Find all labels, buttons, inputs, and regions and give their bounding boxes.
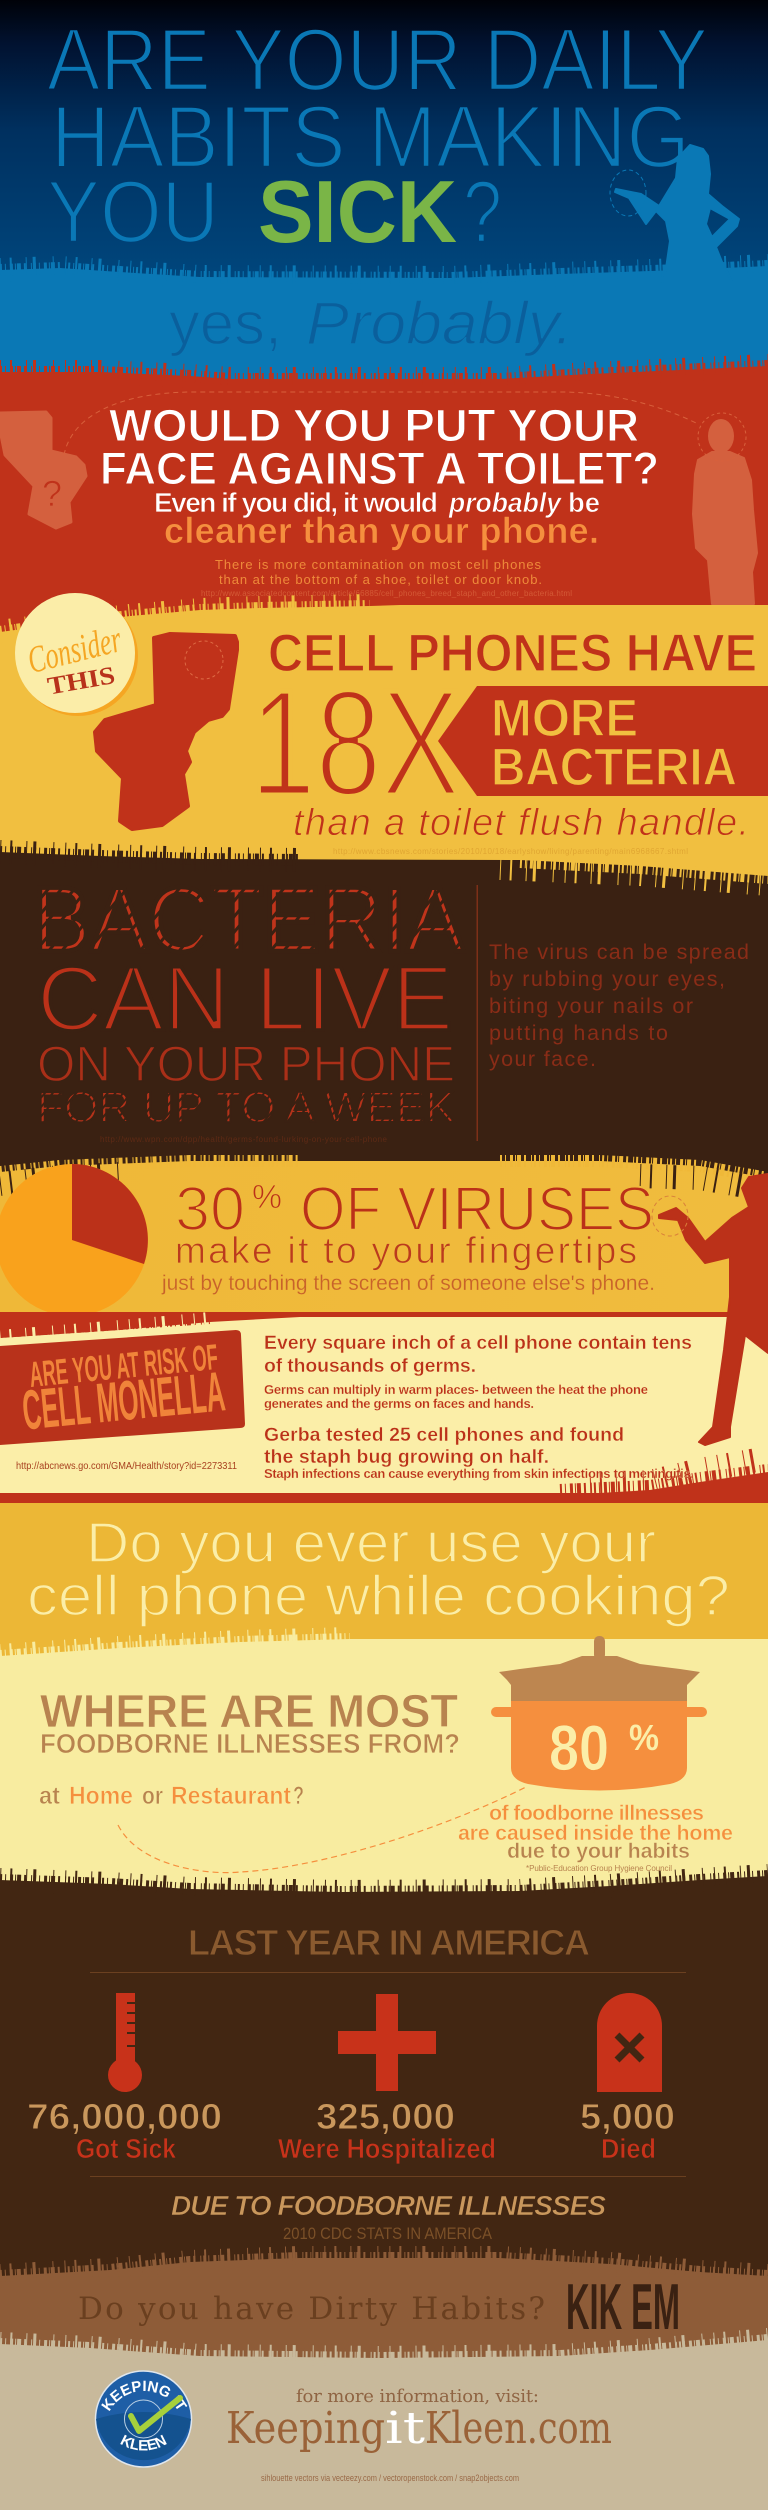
text: at home or restaurant: ?: [293, 1782, 304, 1810]
icon: cooking pot 80%: %: [629, 1717, 659, 1758]
text: than a toilet flush handle: than a toilet flush handle.: [293, 802, 749, 844]
heading: foodborne illnesses from: FOODBORNE ILLNESSES FROM?: [40, 1728, 460, 1759]
text: germs can multiply: [264, 1382, 648, 1411]
heading: due to foodborne illnesses: DUE TO FOODBORNE ILLNESSES: [171, 2190, 606, 2221]
text: every square inch: [264, 1332, 692, 1377]
panel: foodborne illnesses: [0, 1636, 768, 1900]
text: even if you did: be: [568, 487, 600, 518]
text: at home or restaurant: Restaurant: [171, 1782, 292, 1810]
text: virus spread: by rubbing your eyes,: [489, 967, 725, 991]
title: HABITS MAKING: [51, 87, 690, 186]
subheading: yes, Probably: [169, 290, 573, 357]
subheading: yes, Probably: Probably.: [306, 290, 573, 357]
text: keepingitkleen.com: it: [385, 2403, 425, 2454]
title: ?: [463, 162, 502, 261]
heading: can live: CAN LIVE: [37, 948, 453, 1050]
icon: man silhouette: [652, 1174, 768, 1445]
source note: *Public-Education Group Hygiene Council: [526, 1864, 672, 1873]
heading: where are most: WHERE ARE MOST: [40, 1685, 458, 1737]
source link: http://www.cbsnews.com/stories/2010/10/18/earlyshow/living/parenting/main6968667.shtml: [333, 847, 688, 856]
source link: http://abcnews.go.com/GMA/Health/story?id=2273311: [16, 1461, 237, 1472]
text: even if you did: [154, 487, 600, 518]
heading: would you put your face against a toilet: FACE AGAINST A TOILET?: [100, 443, 659, 494]
text: germs can multiply: Germs can multiply in warm places- between the heat the phone: [264, 1382, 648, 1397]
text: even if you did: Even if you did, it would: [154, 487, 438, 518]
stat: got sick: 76,000,000: [27, 2096, 222, 2137]
icon: tombstone: [597, 1993, 662, 2092]
arrow: dashed curve to pot: [118, 1787, 526, 1873]
text: for more information: for more information, visit:: [296, 2386, 539, 2407]
badge: consider this: [15, 593, 138, 716]
banner: more bacteria: [438, 686, 768, 797]
title: SICK: [258, 162, 457, 261]
panel: blue answer band: [0, 145, 768, 400]
divider: [90, 1972, 686, 1973]
text: at home or restaurant: Home: [69, 1782, 133, 1810]
text: gerba tested: Gerba tested 25 cell phones and found: [264, 1424, 624, 1446]
text: of foodborne illnesses caused at home: [458, 1801, 733, 1863]
stat: got sick: [27, 2096, 222, 2164]
title: YOU: [47, 162, 219, 261]
text: gerba tested: the staph bug growing on half.: [264, 1446, 549, 1468]
panel: last year in america: [0, 1876, 768, 2300]
text: every square inch: Every square inch of a cell phone contain tens: [264, 1332, 692, 1354]
title: ARE YOUR DAILY: [47, 10, 708, 109]
text: gerba tested: [264, 1424, 624, 1468]
vertical divider: [476, 885, 478, 1141]
heading: would you put your face against a toilet: WOULD YOU PUT YOUR: [109, 400, 639, 451]
text: at home or restaurant: at: [39, 1782, 61, 1810]
stat: got sick: Got Sick: [76, 2133, 176, 2164]
banner: more bacteria: MORE: [491, 689, 638, 748]
number: 18X: 18X: [250, 658, 460, 827]
text: virus spread: The virus can be spread: [489, 940, 749, 964]
heading: do you ever use your cell phone while cooking: [27, 1511, 730, 1628]
stat: died: 5,000: [580, 2096, 675, 2137]
text: keepingitkleen.com: Kleen.com: [425, 2403, 612, 2454]
tag: are you at risk of cell monella: [0, 1330, 245, 1445]
heading: on your phone: ON YOUR PHONE: [37, 1036, 455, 1092]
heading: 30% of viruses: %: [252, 1178, 282, 1215]
icon: toilet with question mark: ?: [42, 473, 62, 514]
icon: dashed circle on toilet: [185, 641, 223, 679]
panel: dirty habits: [0, 2258, 768, 2380]
tag: are you at risk of cell monella: CELL MONELLA: [19, 1359, 228, 1442]
badge: consider this: Consider: [23, 618, 126, 682]
icon: dashed connector arc: [64, 392, 696, 455]
text: even if you did: probably: [448, 487, 562, 518]
text: keepingitkleen.com: Keeping: [226, 2403, 385, 2454]
heading: would you put your face against a toilet: [100, 400, 659, 494]
banner: more bacteria: BACTERIA: [491, 738, 737, 797]
panel: 18X more bacteria: [0, 593, 768, 890]
panel: cell monella: [0, 1174, 768, 1504]
text: contamination note: [215, 557, 542, 587]
panel: 30 percent of viruses: [0, 1161, 768, 1330]
text: make it to your fingertips: make it to your fingertips: [175, 1230, 637, 1271]
stat: hospitalized: Were Hospitalized: [278, 2133, 496, 2164]
source link: http://www.wpn.com/dpp/health/germs-found-lurking-on-your-cell-phone: [100, 1135, 388, 1144]
stat: hospitalized: 325,000: [316, 2096, 455, 2137]
text: virus spread: putting hands to: [489, 1021, 668, 1045]
text: virus spread: biting your nails or: [489, 994, 693, 1018]
text: of foodborne illnesses caused at home: are caused inside the home: [458, 1821, 733, 1845]
text: contamination note: than at the bottom of a shoe, toilet or door knob.: [219, 572, 542, 587]
heading: for up to a week: FOR UP TO A WEEK: [37, 1083, 455, 1132]
stat: died: Died: [601, 2133, 656, 2164]
stat: died: [580, 2096, 675, 2164]
subheading: yes, Probably: yes,: [169, 290, 282, 357]
text: 2010 cdc stats: 2010 CDC STATS IN AMERICA: [283, 2224, 493, 2243]
logo: keeping it kleen: KLEEN: [120, 2434, 167, 2450]
tag: are you at risk of cell monella: ARE YOU AT RISK OF: [28, 1336, 220, 1395]
title: [47, 10, 708, 261]
stat: hospitalized: [278, 2096, 496, 2164]
text: virus spread: your face.: [489, 1047, 596, 1071]
text: keepingitkleen.com: [226, 2403, 612, 2454]
source link: http://www.associatedcontent.com/article/66885/cell_phones_breed_staph_and_other_bacteria.html: [201, 589, 572, 598]
panel: bacteria can live: [0, 852, 768, 1200]
logo: keeping it kleen: [94, 2370, 192, 2468]
text: of foodborne illnesses caused at home: due to your habits: [507, 1839, 690, 1863]
icon: toilet with question mark: [0, 412, 86, 528]
text: of foodborne illnesses caused at home: of foodborne illnesses: [489, 1801, 704, 1825]
text: every square inch: of thousands of germs.: [264, 1355, 476, 1377]
text: credits: sihlouette vectors via vecteezy.com / vectoropenstock.com / snap2objects.com: [261, 2473, 519, 2483]
icon: dashed circle around phone: [610, 170, 646, 216]
text: cleaner than your phone: cleaner than your phone.: [164, 510, 599, 551]
badge: consider this: THIS: [45, 662, 117, 701]
icon: medical cross: [338, 1994, 436, 2091]
text: at home or restaurant: or: [142, 1782, 163, 1810]
icon: person silhouette: [693, 413, 757, 604]
text: germs can multiply: generates and the germs on faces and hands.: [264, 1396, 534, 1411]
text: contamination note: There is more contamination on most cell phones: [215, 557, 542, 572]
icon: woman silhouette: [615, 145, 739, 282]
icon: cooking pot 80%: [491, 1636, 707, 1790]
icon: thermometer: [108, 1993, 142, 2092]
text: do you have dirty habits: Do you have Dirty Habits?: [78, 2291, 545, 2327]
chart: pie 30 percent: [0, 1164, 148, 1316]
heading: do you ever use your cell phone while cooking: Do you ever use your: [86, 1511, 656, 1575]
panel: night sky header: [0, 0, 768, 300]
icon: cooking pot 80%: 80: [549, 1712, 609, 1784]
heading: last year in america: LAST YEAR IN AMERICA: [188, 1922, 590, 1963]
panel: cooking question: [0, 1503, 768, 1663]
text: at home or restaurant: [39, 1782, 304, 1810]
icon: red toilet: [95, 634, 237, 829]
heading: 30% of viruses: OF VIRUSES: [300, 1175, 654, 1244]
divider: [90, 2176, 686, 2177]
text: virus spread: [489, 940, 749, 1071]
heading: 30% of viruses: 30: [175, 1175, 245, 1244]
text: just by touching: just by touching the screen of someone else's phone.: [161, 1272, 655, 1295]
heading: do you ever use your cell phone while cooking: cell phone while cooking?: [27, 1564, 730, 1628]
panel: toilet question: [0, 366, 768, 640]
logo: keeping it kleen: KEEPING IT: [101, 2380, 188, 2411]
heading: bacteria dashed: BACTERIA: [33, 869, 465, 971]
panel: footer: [0, 2328, 768, 2510]
text: staph infections: Staph infections can cause everything from skin infections to meningitis.: [264, 1466, 694, 1481]
